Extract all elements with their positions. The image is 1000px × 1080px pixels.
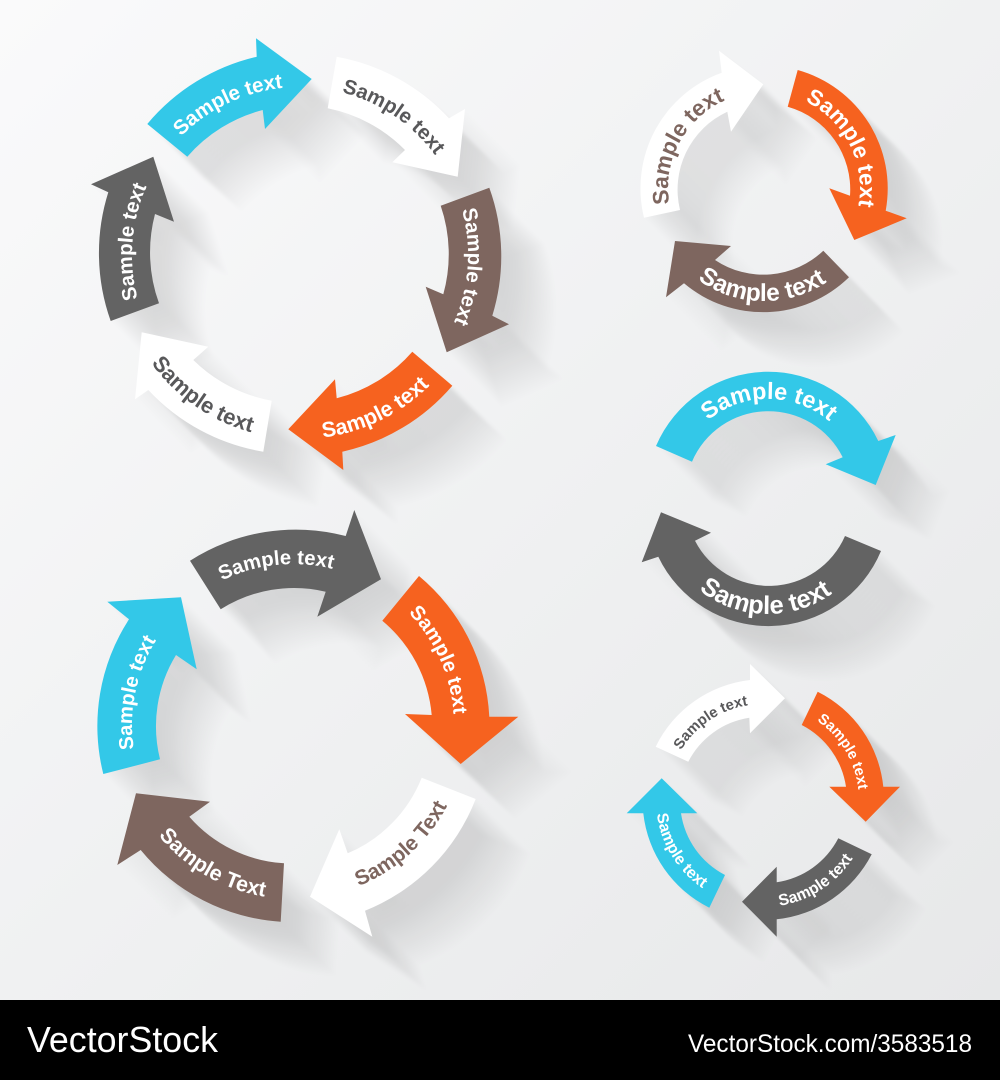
arrow: brown: Sample text <box>700 268 827 306</box>
arrow: orange: Sample text <box>807 90 874 208</box>
arrow: brown <box>117 793 284 922</box>
footer bar <box>0 1000 1000 1080</box>
arrow: blue <box>147 38 312 157</box>
arrow: orange <box>288 352 452 470</box>
long shadows: three-arrow cycle <box>640 51 907 312</box>
diagram: six-arrow cycle, top left <box>91 38 544 510</box>
arrow: orange <box>802 692 900 822</box>
arrow: dark grey <box>91 156 174 321</box>
arrow: white <box>656 664 785 762</box>
arrow: white <box>640 51 763 218</box>
long shadows: five-arrow cycle <box>97 510 518 937</box>
arrow: orange: Sample text <box>818 714 868 790</box>
arrow: white: Sample Text <box>355 800 447 884</box>
arrow: blue: Sample text <box>174 74 282 134</box>
arrow: white top right <box>328 57 465 177</box>
arrow: brown: Sample text <box>454 208 482 326</box>
arrow: brown <box>666 241 849 312</box>
arrow: orange <box>382 576 518 764</box>
arrow: blue: Sample text <box>119 635 156 749</box>
long shadows: four-arrow cycle <box>627 664 900 937</box>
diagram: five-arrow cycle, bottom left <box>97 510 544 976</box>
arrow: white <box>310 778 476 936</box>
arrow: orange: Sample text <box>410 606 466 714</box>
arrow: white bottom left: Sample text <box>154 356 254 432</box>
diagram: three-arrow cycle, top right <box>640 51 938 352</box>
arrow: blue <box>626 778 725 908</box>
arrow: orange: Sample text <box>322 377 430 437</box>
arrow: white top right: Sample text <box>343 80 444 155</box>
arrow: blue <box>97 597 197 774</box>
arrow: brown <box>426 188 509 352</box>
arrow: brown: Sample Text <box>160 828 266 896</box>
long shadows: two-arrow cycle <box>642 372 896 626</box>
arrow: dark grey <box>642 512 881 626</box>
arrow: dark grey <box>190 510 381 617</box>
arrow: blue <box>656 372 896 485</box>
arrow: dark grey: Sample text <box>118 182 146 300</box>
arrow: dark grey: Sample text <box>702 578 832 618</box>
footer logo text: VectorStock <box>27 1019 219 1060</box>
arrow: blue: Sample text <box>657 814 708 888</box>
arrow: dark grey <box>742 838 872 937</box>
arrow: orange <box>788 70 907 240</box>
diagram: two-arrow cycle, middle right <box>642 372 931 666</box>
diagram: four-arrow cycle, bottom right <box>626 664 934 976</box>
arrow: white: Sample text <box>674 696 748 749</box>
arrow: blue: Sample text <box>701 382 837 422</box>
footer url text: VectorStock.com/3583518 <box>688 1030 972 1058</box>
arrow: white: Sample text <box>652 88 725 204</box>
arrow: dark grey: Sample text <box>778 854 853 906</box>
arrow: white bottom left <box>135 332 272 452</box>
long shadows: six-arrow cycle <box>91 38 509 470</box>
arrow: dark grey: Sample text <box>218 550 335 579</box>
